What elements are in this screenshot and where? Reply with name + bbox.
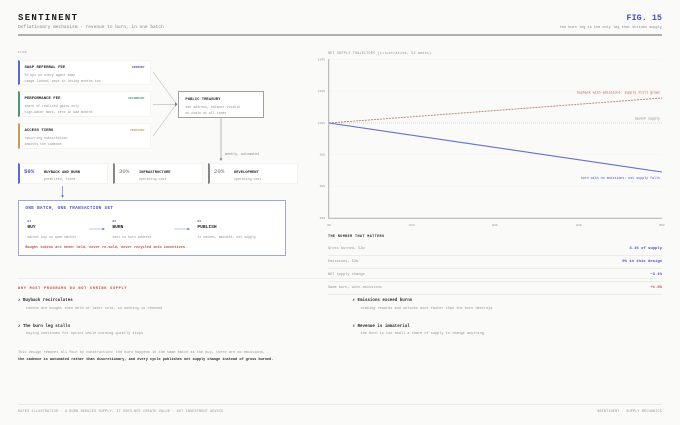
card title: SWAP REFERRAL FEE xyxy=(24,66,65,70)
step: burn: BURN xyxy=(112,225,123,230)
card description: high-water mark, zero in bad months xyxy=(24,110,93,114)
card description xyxy=(24,72,101,83)
conclusion text: This design removes all four by construction: the burn happens in the same batch as the buy, there are no emissions, xyxy=(18,350,265,354)
item: buyback recirculates: ✗ xyxy=(18,299,21,303)
item: revenue is immaterial: ✗ xyxy=(352,324,355,328)
panel: public treasury xyxy=(178,91,264,118)
section heading: why most programs: WHY MOST PROGRAMS DO NOT SHRINK SUPPLY xyxy=(18,286,127,290)
batch warning: Bought tokens are never held, never re-sold, never recycled into incentives. xyxy=(25,246,187,250)
footer xyxy=(18,404,662,414)
card description xyxy=(24,136,68,146)
row: emissions: Emissions, 52w xyxy=(328,260,358,264)
conclusion text: the cadence is automated rather than discretionary, and every cycle publishes net supply change instead of gross burned. xyxy=(18,358,273,362)
row: net supply change: −3.1% xyxy=(650,273,662,277)
item: emissions exceed burns: Emissions exceed burns xyxy=(358,299,412,303)
batch title: ONE BATCH, ONE TRANSACTION SET xyxy=(25,206,113,211)
item: buyback recirculates: tokens are bought then held or later sold, so nothing is removed xyxy=(26,306,162,310)
step: publish: PUBLISH xyxy=(197,225,217,230)
conclusion text xyxy=(18,350,273,362)
line chart: net supply: 100% xyxy=(318,122,325,125)
treasury description: on-chain at all times xyxy=(185,111,226,115)
step: buy: 01 xyxy=(27,220,31,222)
header xyxy=(18,12,662,36)
row: gross burned: 3.1% of supply xyxy=(629,247,662,251)
line chart: net supply: 98% xyxy=(320,154,325,156)
row: same burn with emissions: Same burn, with emissions xyxy=(328,286,382,290)
line chart: net supply: burn with no emissions: net supply falls xyxy=(581,176,660,180)
allocation title: DEVELOPMENT xyxy=(234,170,259,174)
footer source: $SENTINENT · SUPPLY MECHANICS xyxy=(597,410,662,414)
subtitle: Deflationary mechanism · revenue to burn, in one batch xyxy=(18,25,164,30)
treasury description xyxy=(185,105,240,115)
chart label: NET SUPPLY TRAJECTORY (illustrative, 52 weeks) xyxy=(328,50,431,54)
row: gross burned: Gross burned, 52w xyxy=(328,247,365,251)
line chart: net supply: buyback with emissions: supply still grows xyxy=(577,90,660,94)
line chart: net supply: 96% xyxy=(320,185,325,188)
step: publish: 03 xyxy=(197,220,201,222)
step: publish: tx hashes, amounts, net supply xyxy=(197,234,256,238)
card description: usage-linked, pays in losing months too xyxy=(24,78,101,82)
line chart: net supply: W0 xyxy=(327,224,331,227)
allocation title: INFRASTRUCTURE xyxy=(139,170,171,174)
panel: infrastructure 30% xyxy=(113,163,202,184)
card tag: PRIMARY xyxy=(132,66,144,68)
panel: one batch xyxy=(18,200,286,256)
row: emissions xyxy=(328,256,662,268)
item: the burn leg stalls: The burn leg stalls xyxy=(23,324,70,328)
line chart: net supply: launch supply xyxy=(634,116,660,120)
card title: ACCESS TIERS xyxy=(24,129,53,133)
section divider xyxy=(18,277,662,280)
step: buy: BUY xyxy=(27,225,36,230)
row: same burn with emissions: +1.6% xyxy=(650,286,662,290)
row: same burn with emissions xyxy=(328,282,662,294)
allocation note: operating cost xyxy=(234,177,261,181)
item: emissions exceed burns: staking rewards and unlocks mint faster than the burn destroys xyxy=(360,306,492,310)
table heading: THE NUMBER THAT MATTERS xyxy=(328,234,384,238)
card title: PERFORMANCE FEE xyxy=(24,97,61,101)
table: the number that matters xyxy=(328,234,662,295)
percent: 30% xyxy=(119,168,129,175)
row: net supply change: NET supply change xyxy=(328,273,365,277)
item: revenue is immaterial: Revenue is immaterial xyxy=(358,324,410,328)
step: burn xyxy=(112,220,152,238)
panel: development 20% xyxy=(208,163,298,184)
panel: access tiers xyxy=(18,122,151,149)
arrow label: weekly, automated xyxy=(225,153,259,157)
card description xyxy=(24,104,93,114)
line chart: net supply: 104% xyxy=(318,58,325,62)
line chart: net supply: W39 xyxy=(576,224,582,227)
footer disclaimer: RATES ILLUSTRATIVE · A BURN REDUCES SUPPLY, IT DOES NOT CREATE VALUE · NOT INVESTMENT ADVICE xyxy=(18,410,224,414)
step: publish xyxy=(197,220,256,239)
step: buy: market buy on open market xyxy=(27,234,76,238)
title: SENTINENT xyxy=(18,12,78,22)
item: emissions exceed burns: ✗ xyxy=(352,299,355,303)
line chart: net supply: 102% xyxy=(318,90,325,93)
allocation note: operating cost xyxy=(139,177,166,181)
card description: smooths the cadence xyxy=(24,142,62,146)
row: emissions: 0% in this design xyxy=(622,260,662,264)
step: burn: 02 xyxy=(112,220,116,222)
item: the burn leg stalls: ✗ xyxy=(18,324,21,328)
item: revenue is immaterial: the burn is too small a share of supply to change anything xyxy=(360,332,484,336)
percent: 50% xyxy=(24,168,34,175)
panel: buyback and burn 50% xyxy=(18,163,108,184)
item: emissions exceed burns xyxy=(352,298,492,310)
item: the burn leg stalls xyxy=(18,324,143,336)
flow label: FLOW xyxy=(18,50,27,54)
panel: performance fee xyxy=(18,91,151,117)
line chart: net supply: W13 xyxy=(409,224,415,227)
row: gross burned xyxy=(328,242,662,256)
figure number: FIG. 15 xyxy=(627,13,662,23)
row: net supply change xyxy=(328,268,662,282)
card tag: TERTIARY xyxy=(130,129,144,132)
allocation note: permitted, fixed xyxy=(44,177,75,181)
card description: recurring subscription xyxy=(24,136,67,140)
card description: share of realized gains only xyxy=(24,104,79,108)
line chart: net supply: W52 xyxy=(659,224,665,227)
item: buyback recirculates xyxy=(18,298,162,310)
treasury title: PUBLIC TREASURY xyxy=(185,98,220,102)
panel: swap referral fee xyxy=(18,60,151,85)
item: the burn leg stalls: buying continues for optics while burning quietly stops xyxy=(26,332,143,336)
step: burn: sent to burn address xyxy=(112,234,151,238)
figure caption: the burn leg is the only leg that shrinks supply xyxy=(560,26,662,30)
item: revenue is immaterial xyxy=(352,324,484,336)
line chart: net supply: W26 xyxy=(492,224,498,227)
step: buy xyxy=(27,220,76,239)
header rule xyxy=(18,34,662,36)
item: buyback recirculates: Buyback recirculates xyxy=(23,299,73,303)
treasury description: see address, balance visible xyxy=(185,105,240,109)
card description: 50 bps on every agent swap xyxy=(24,72,75,76)
percent: 20% xyxy=(214,168,224,175)
card tag: SECONDARY xyxy=(128,97,144,100)
allocation title: BUYBACK AND BURN xyxy=(44,170,80,174)
line chart: net supply: 94% xyxy=(320,217,325,220)
